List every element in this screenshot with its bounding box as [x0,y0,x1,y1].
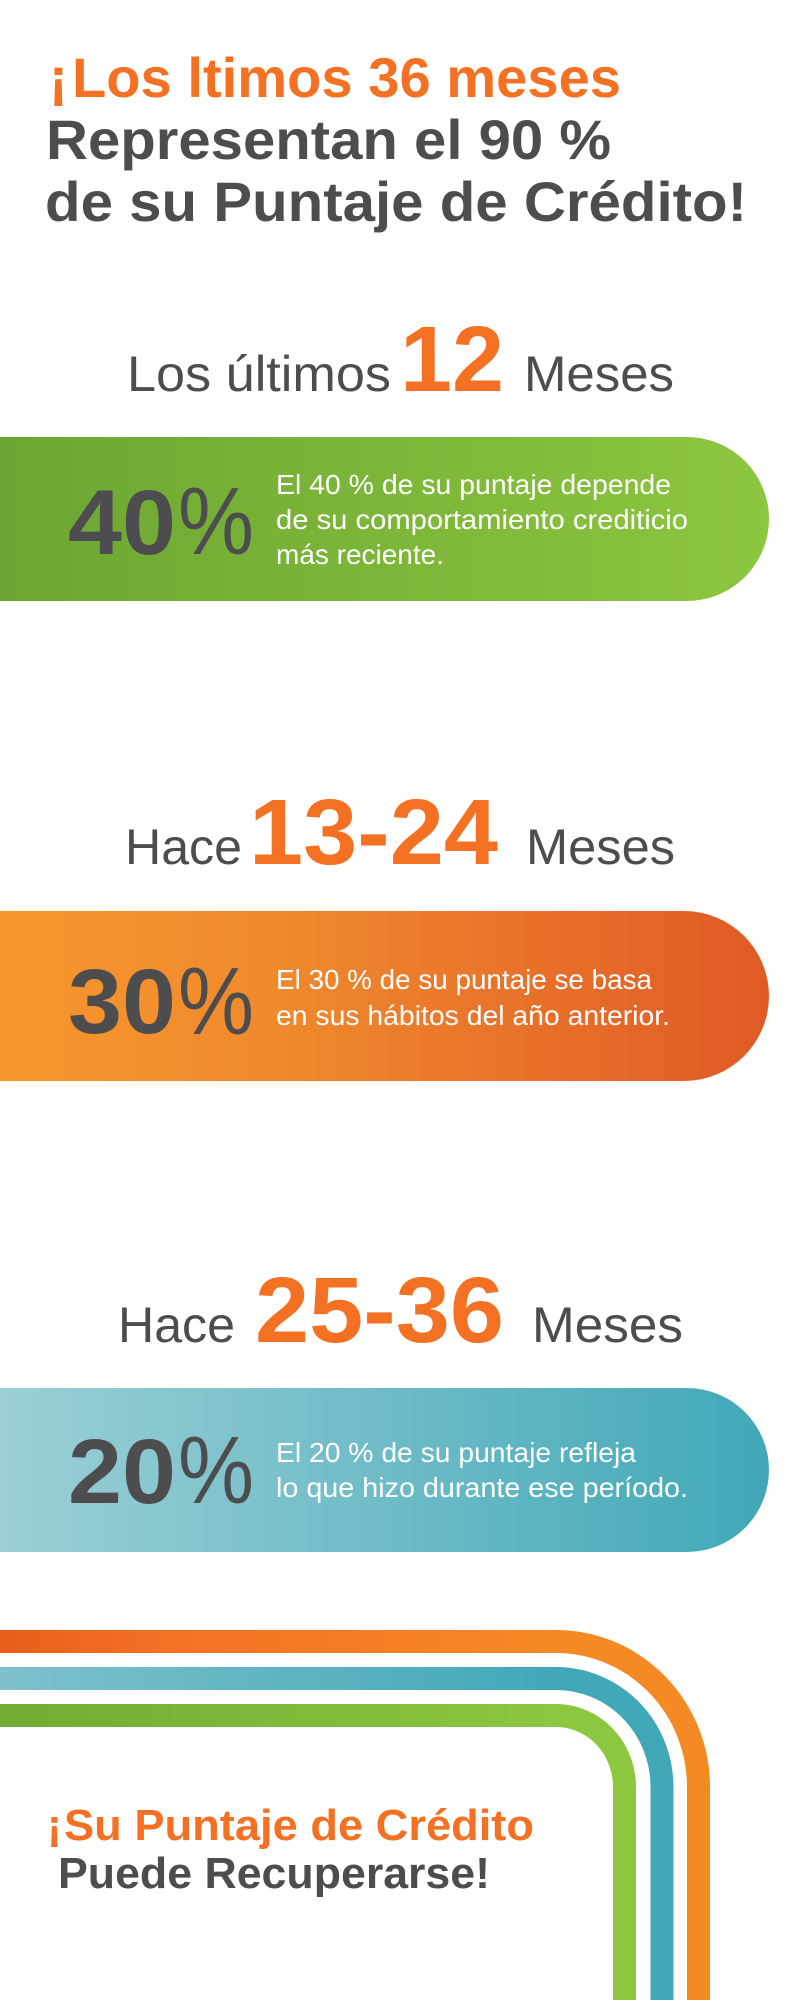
heading label left: Los últimos [127,346,391,402]
panel: 20 percent [0,1388,769,1552]
description: en sus hábitos del año anterior. [276,1000,670,1031]
stat: 30: 30 [68,951,176,1053]
stat: percent sign: % [178,1417,254,1524]
heading label right: Meses [526,819,675,875]
stat: 40: 40 [68,472,176,574]
orange stripe [0,1642,698,2000]
description [276,469,688,570]
heading: last 12 months [127,307,674,411]
heading number: 25-36 [255,1258,504,1362]
closing line 1: ¡ [47,1801,62,1850]
green bar [0,437,769,601]
closing message [47,1801,534,1898]
description [276,1437,688,1503]
panel: 30 percent [0,911,769,1081]
description [276,964,670,1031]
teal stripe [0,1678,662,2000]
description: lo que hizo durante ese período. [276,1472,688,1503]
heading label left: Hace [125,819,242,875]
stat: percent sign: % [178,468,254,575]
heading label left: Hace [118,1297,235,1353]
description: El 40 % de su puntaje depende [276,469,671,500]
green stripe [0,1716,624,2000]
closing line 1: Su Puntaje de Crédito [64,1801,534,1850]
title line 3: de su Puntaje de Crédito! [45,170,747,233]
title [45,46,747,233]
title line 2: Representan el 90 % [46,108,611,171]
stat: 20: 20 [68,1421,176,1523]
heading label right: Meses [524,346,674,402]
heading: 13-24 months [125,780,675,884]
closing line 2: Puede Recuperarse! [58,1849,490,1898]
description: El 20 % de su puntaje refleja [276,1437,636,1468]
heading number: 12 [400,307,504,411]
title line 1: Los ltimos 36 meses [72,46,621,109]
panel: 40 percent [0,437,769,601]
description: El 30 % de su puntaje se basa [276,964,652,995]
orange bar [0,911,769,1081]
stat: percent sign: % [178,948,254,1055]
title line 1: ¡ [49,46,68,109]
teal bar [0,1388,769,1552]
heading number: 13-24 [249,780,498,884]
description: de su comportamiento crediticio [276,504,688,535]
description: más reciente. [276,539,444,570]
heading: 25-36 months [118,1258,683,1362]
heading label right: Meses [532,1297,683,1353]
curved stripes [0,1642,698,2000]
